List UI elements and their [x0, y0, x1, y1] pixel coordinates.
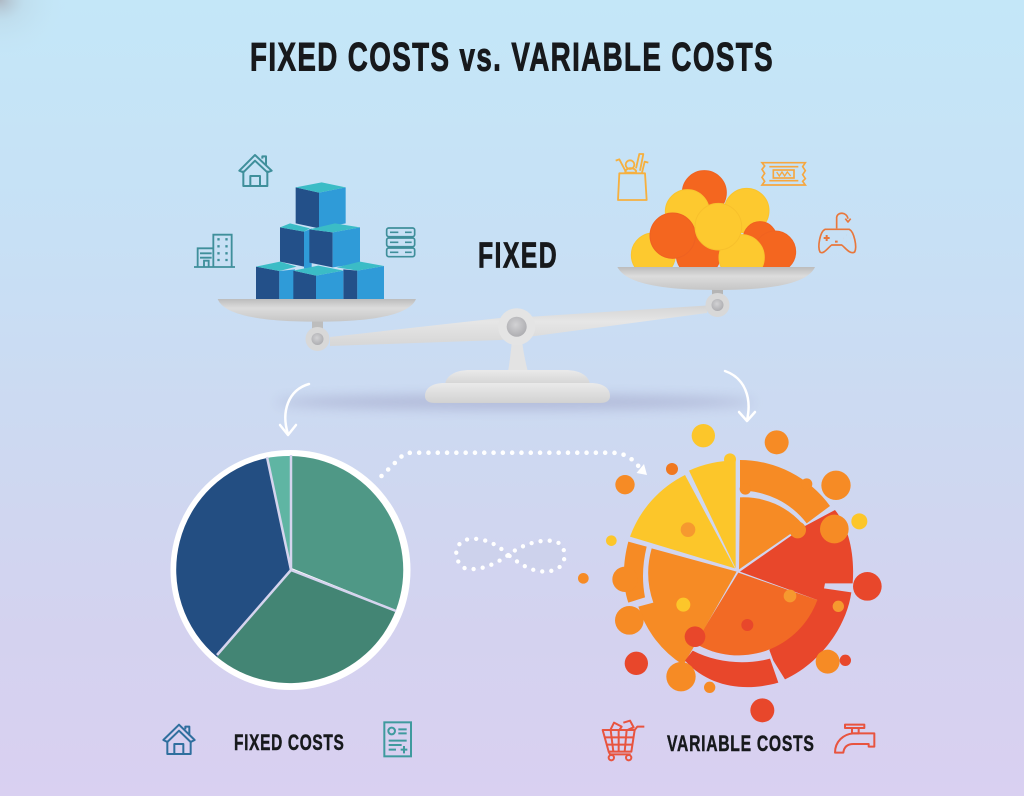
balance scale [306, 289, 730, 403]
slice: inner orange [739, 497, 803, 569]
pie chart: fixed costs [170, 450, 410, 690]
icon: game controller [819, 213, 856, 253]
left stem and pivot [306, 320, 330, 351]
title: FIXED COSTS vs. VARIABLE COSTS [250, 36, 774, 80]
slice: navy blue [176, 458, 290, 657]
pie white ring [170, 450, 410, 690]
icon: document [384, 722, 411, 756]
scale base [425, 340, 610, 403]
scattered bubbles [578, 424, 882, 722]
slice: large orange [638, 548, 737, 665]
label: fixed: FIXED [478, 234, 558, 276]
arrow: scale to fixed pie [280, 384, 309, 435]
slice: top yellow [689, 461, 736, 568]
icon: grocery bag [616, 154, 648, 200]
icon: server stack [387, 228, 415, 257]
dotted infinity symbol [456, 539, 565, 571]
icon: ticket [762, 163, 805, 185]
slice: teal [267, 456, 290, 570]
right scale pan with balls [616, 154, 856, 290]
scale shadow [275, 395, 755, 409]
pie chart: variable costs [578, 424, 882, 722]
scale beam [330, 306, 707, 346]
legend: fixed costs [163, 722, 411, 756]
slice and ring: red [740, 510, 853, 679]
icon: shopping cart [603, 721, 644, 760]
slice: dark green [217, 571, 396, 683]
icon: water faucet [835, 725, 874, 753]
icon: house [239, 155, 272, 186]
left scale pan with blocks [194, 155, 416, 322]
center pivot [498, 308, 535, 345]
ring: bottom red [685, 651, 778, 687]
slice: light green [292, 456, 403, 610]
icon: office buildings [194, 235, 235, 267]
ring: top orange [740, 460, 830, 523]
ring: left orange [624, 542, 647, 603]
left pan [218, 299, 416, 322]
legend: variable costs [603, 721, 874, 760]
stacked blue blocks [256, 182, 384, 299]
label: fixed costs: FIXED COSTS [234, 730, 344, 755]
top-left corner tint [0, 0, 70, 60]
pile of orange and yellow balls [630, 170, 796, 267]
slice: deep orange [695, 573, 817, 655]
arrow: scale to variable pie [725, 371, 755, 421]
pie separators [217, 455, 396, 655]
right pan [617, 267, 815, 290]
label: variable costs: VARIABLE COSTS [667, 731, 814, 756]
slice: left yellow [630, 475, 735, 568]
right stem and pivot [706, 289, 730, 317]
icon: house [163, 725, 195, 754]
dotted connector arrow [382, 453, 647, 476]
